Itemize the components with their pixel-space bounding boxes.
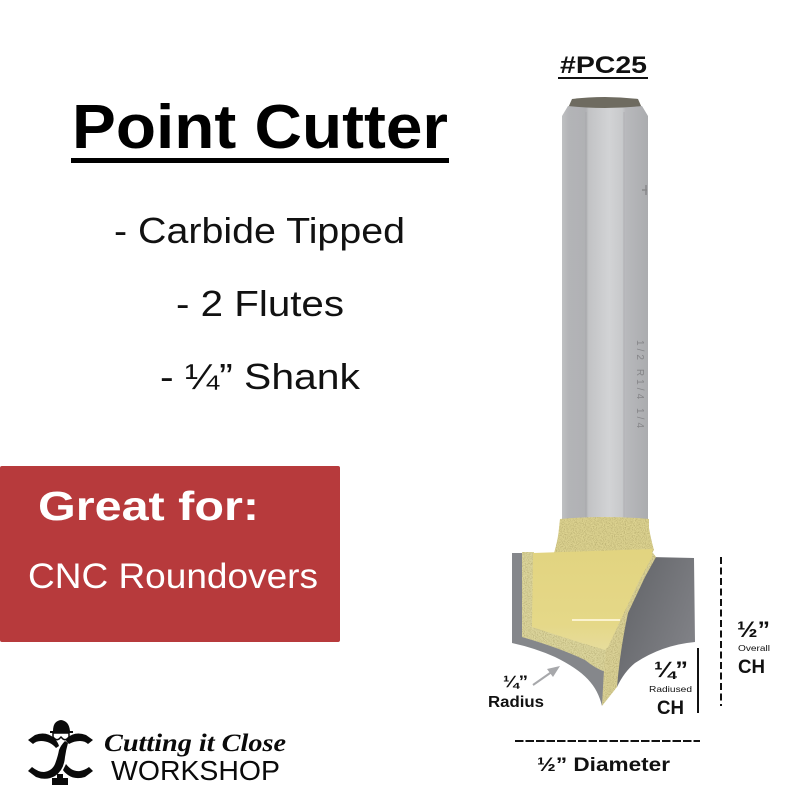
icon: workshop mascot [28,720,93,785]
carbide edge left [522,552,608,672]
right steel flute [610,557,695,687]
carbide edge right [602,549,656,706]
radius callout [488,666,560,711]
shank [562,97,648,520]
radiused cutting height dimension: CH [657,698,684,719]
feature: flutes: - 2 Flutes [176,283,344,324]
panel: great for [0,466,340,642]
radius callout: Radius [488,694,544,711]
logo script text: Cutting it Close [104,730,286,757]
radiused cutting height dimension: Radiused [649,684,692,694]
radiused cutting height dimension [649,648,698,719]
radiused cutting height dimension: ¼” [654,657,688,682]
router bit photo [512,97,695,706]
title: Point Cutter [72,93,448,162]
carbide neck [554,517,654,553]
logo workshop text: WORKSHOP [111,755,280,786]
overall cutting height dimension: Overall [738,643,770,653]
part number: #PC25 [560,52,647,79]
overall cutting height dimension: ½” [737,617,770,642]
overall cutting height dimension: CH [738,657,765,678]
feature: shank: - ¼” Shank [160,356,361,397]
feature list [114,210,405,397]
feature: carbide tipped: - Carbide Tipped [114,210,405,251]
shank engraving: 1/2 R1/4 1/4 [634,340,645,428]
left steel flute [512,553,610,706]
overall cutting height dimension [721,557,770,706]
diameter dimension: ½” Diameter [537,755,671,776]
logo [28,720,286,786]
radius callout: ¼” [503,672,528,691]
panel heading: Great for: [38,483,259,529]
yellow rake face [532,549,652,650]
icon: arrow [533,666,560,685]
panel text: CNC Roundovers [28,557,318,596]
